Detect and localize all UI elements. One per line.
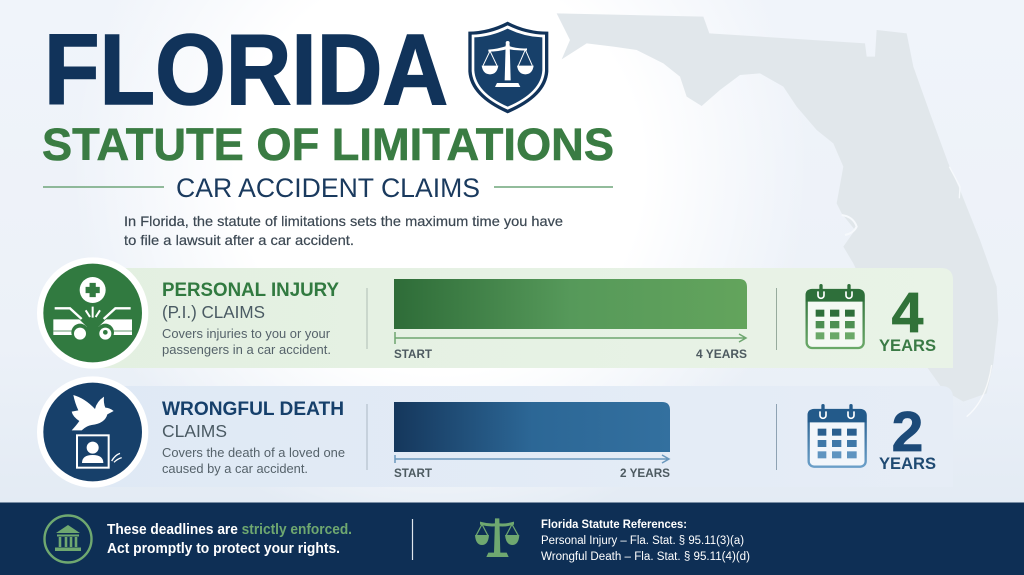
Florida map silhouette bbox=[557, 13, 998, 417]
text: personal injury description: PERSONAL INJURY bbox=[162, 279, 339, 301]
icon: dove and portrait badge bbox=[37, 376, 148, 488]
value: 2 years: 2 bbox=[892, 400, 923, 464]
bar: four year timeline: START bbox=[394, 347, 433, 361]
intro text bbox=[124, 213, 563, 248]
value: 2 years: YEARS bbox=[879, 454, 936, 473]
text: deadline warning bbox=[107, 522, 352, 557]
bar: two year timeline: 2 YEARS bbox=[620, 466, 670, 480]
bar: two year timeline: START bbox=[394, 466, 433, 480]
text: wrongful death description: caused by a car accident. bbox=[162, 461, 308, 476]
icon: blue calendar bbox=[808, 404, 866, 467]
icon: green calendar bbox=[806, 284, 864, 348]
text: personal injury description bbox=[162, 279, 339, 357]
panel: wrongful death claims bbox=[92, 386, 953, 487]
text: wrongful death description: Covers the death of a loved one bbox=[162, 445, 345, 460]
text: personal injury description: (P.I.) CLAIMS bbox=[162, 302, 265, 322]
text: deadline warning: These deadlines are strictly enforced. bbox=[107, 522, 352, 538]
text: wrongful death description bbox=[162, 398, 345, 476]
title: FLORIDA: FLORIDA bbox=[44, 14, 448, 126]
value: 2 years bbox=[879, 400, 936, 473]
text: statute references: Wrongful Death – Fla. Stat. § 95.11(4)(d) bbox=[541, 551, 750, 563]
icon: car collision badge bbox=[37, 257, 148, 369]
value: 4 years: 4 bbox=[892, 281, 924, 345]
value: 4 years: YEARS bbox=[879, 336, 936, 355]
footer bar bbox=[0, 502, 1024, 575]
bar: four year timeline bbox=[394, 279, 747, 361]
bar: four year timeline: 4 YEARS bbox=[696, 347, 747, 361]
text: statute references: Personal Injury – Fla. Stat. § 95.11(3)(a) bbox=[541, 535, 744, 547]
icon: shield with scales of justice bbox=[468, 22, 548, 113]
intro text: to file a lawsuit after a car accident. bbox=[124, 232, 354, 248]
bar: two year timeline bbox=[394, 402, 670, 480]
text: deadline warning: Act promptly to protect your rights. bbox=[107, 541, 340, 557]
heading: Statute of Limitations: STATUTE OF LIMITATIONS bbox=[42, 119, 614, 170]
icon: green scales bbox=[475, 518, 519, 557]
icon: courthouse bbox=[44, 516, 92, 562]
panel: personal injury claims bbox=[92, 268, 953, 368]
text: wrongful death description: WRONGFUL DEATH bbox=[162, 398, 344, 420]
text: personal injury description: passengers in a car accident. bbox=[162, 342, 331, 357]
text: personal injury description: Covers injuries to you or your bbox=[162, 326, 331, 341]
value: 4 years bbox=[879, 281, 936, 355]
intro text: In Florida, the statute of limitations sets the maximum time you have bbox=[124, 213, 563, 229]
subheading: Car Accident Claims: CAR ACCIDENT CLAIMS bbox=[176, 173, 480, 203]
text: statute references bbox=[541, 519, 750, 563]
text: statute references: Florida Statute References: bbox=[541, 519, 687, 531]
text: wrongful death description: CLAIMS bbox=[162, 421, 227, 441]
